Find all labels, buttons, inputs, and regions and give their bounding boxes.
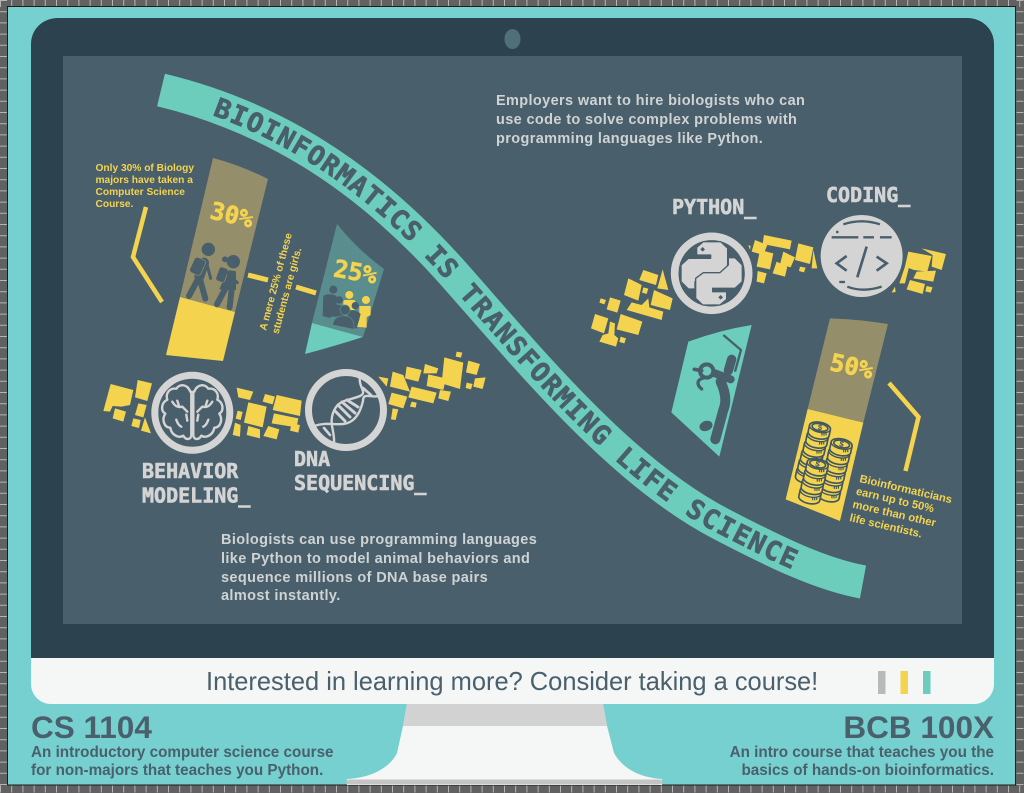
icon: dna	[308, 372, 384, 448]
label: python: PYTHON_	[672, 195, 757, 219]
label: dna sequencing: DNA	[294, 447, 330, 471]
text: biologists: almost instantly.	[221, 588, 341, 604]
screen	[63, 56, 962, 624]
label: coding: CODING_	[826, 183, 911, 207]
data ribbon left: pixels	[103, 352, 486, 439]
icon: coin stacks: $	[815, 459, 821, 469]
course: CS 1104: for non-majors that teaches you Python.	[31, 762, 323, 779]
monitor stand	[346, 704, 663, 785]
title ribbon: BIOINFORMATICS IS TRANSFORMING LIFE SCIENCE	[213, 97, 799, 569]
callout: 50 percent earnings: Bioinformaticians	[858, 473, 953, 506]
text: biologists: like Python to model animal behaviors and	[221, 551, 530, 567]
callout: 50 percent earnings: life scientists.	[848, 512, 923, 541]
callout: 30 percent of majors: Only 30% of Biology	[96, 163, 194, 174]
connector dashes with rotated note: students are girls.	[271, 246, 304, 335]
callout: 30 percent of majors: majors have taken a	[96, 175, 193, 186]
chart: 50 percent bar: 50%	[828, 348, 876, 385]
course: BCB 100X: An intro course that teaches you the	[730, 744, 994, 761]
callout: 30 percent of majors: Course.	[96, 199, 134, 210]
icon: coin stacks: $	[817, 423, 824, 432]
text: employers: programming languages like Python.	[496, 131, 763, 147]
course: BCB 100X: BCB 100X	[843, 709, 994, 745]
chart: 25 percent shape	[305, 224, 384, 354]
callout: 30 percent of majors	[96, 163, 197, 302]
icon: students	[189, 243, 240, 307]
callout: 50 percent earnings: more than other	[851, 499, 938, 530]
course: CS 1104: CS 1104	[31, 709, 152, 745]
callout: 50 percent earnings: earn up to 50%	[855, 486, 935, 515]
icon: brain	[155, 375, 230, 450]
icon: golfer panel	[671, 325, 752, 457]
chart: 25 percent shape: 25%	[332, 255, 380, 290]
text: employers: Employers want to hire biologists who can	[496, 93, 805, 109]
course: BCB 100X	[730, 709, 994, 779]
course: BCB 100X: basics of hands-on bioinformatics.	[741, 762, 994, 779]
callout: 50 percent earnings	[848, 383, 953, 541]
webcam	[504, 29, 520, 49]
connector dashes with rotated note: A mere 25% of these	[258, 232, 295, 332]
icon: python logo	[675, 236, 749, 310]
course: CS 1104: An introductory computer science course	[31, 744, 334, 761]
connector dashes with rotated note	[248, 229, 316, 335]
icon: coin stacks: $	[839, 439, 845, 449]
call to action text: Interested in learning more? Consider taking a course!	[206, 668, 818, 696]
chart: 50 percent bar	[786, 318, 888, 521]
text: biologists: sequence millions of DNA base pairs	[221, 570, 488, 586]
label: behavior modeling: BEHAVIOR	[142, 459, 239, 483]
label: behavior modeling: MODELING_	[142, 484, 251, 508]
icon: group of people	[323, 286, 371, 329]
label: dna sequencing: SEQUENCING_	[294, 471, 427, 495]
text: biologists: Biologists can use programming languages	[221, 532, 537, 548]
chart: 30 percent bar	[166, 158, 268, 361]
callout: 30 percent of majors: Computer Science	[96, 187, 185, 198]
monitor chin	[31, 658, 994, 704]
icon: coin stacks	[794, 420, 853, 506]
text: employers: use code to solve complex problems with	[496, 112, 797, 128]
chin indicator lights	[878, 671, 930, 694]
icon: code window	[821, 215, 903, 297]
course: CS 1104	[31, 709, 334, 779]
monitor bezel	[31, 18, 994, 658]
chart: 30 percent bar: 30%	[208, 197, 257, 234]
data ribbon right: pixels	[591, 235, 946, 347]
